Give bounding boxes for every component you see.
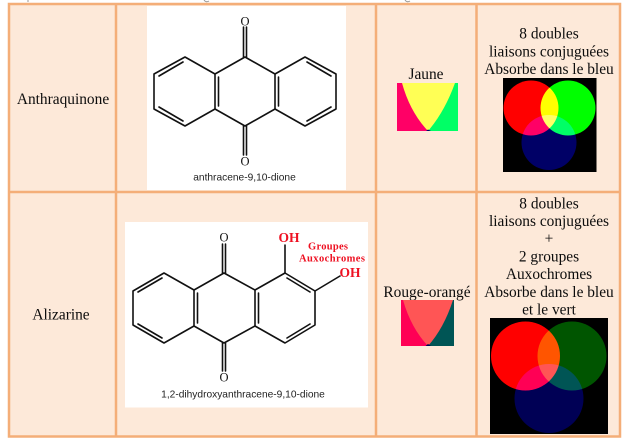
structure: anthraquinone <box>147 6 346 190</box>
auxochrome groups in red <box>278 230 365 280</box>
structure: anthraquinone: O <box>240 154 250 168</box>
clipped text fragments above the table <box>28 0 410 2</box>
structure: alizarine: 1,2-dihydroxyanthracene-9,10-dione <box>161 390 325 400</box>
additive colour diagram: absorbs blue <box>503 78 596 172</box>
absorption text: Alizarine: liaisons conjuguées <box>489 213 609 230</box>
additive colour diagram: absorbs blue and green <box>490 318 608 434</box>
colour name and swatch: Jaune: Jaune <box>408 66 444 83</box>
absorption text: Alizarine: Absorbe dans le bleu <box>484 284 614 301</box>
auxochrome groups in red: OH <box>339 265 361 280</box>
absorption text: Alizarine <box>484 196 614 318</box>
colour name and swatch: Rouge-orangé: Rouge-orangé <box>383 284 471 301</box>
colour name and swatch: Rouge-orangé <box>383 284 471 346</box>
absorption text: Alizarine: + <box>545 230 553 248</box>
structure: anthraquinone: O <box>240 14 250 28</box>
structure: alizarine <box>125 222 368 408</box>
absorption text: Anthraquinone <box>484 26 614 78</box>
structure: anthraquinone: anthracene-9,10-dione <box>193 172 296 184</box>
absorption text: Anthraquinone: 8 doubles <box>519 26 579 42</box>
absorption text: Alizarine: et le vert <box>522 302 577 318</box>
absorption text: Anthraquinone: Absorbe dans le bleu <box>484 61 614 78</box>
structure: alizarine: O <box>219 230 229 244</box>
colour name and swatch: Jaune <box>397 66 458 131</box>
absorption text: Alizarine: 2 groupes <box>519 248 579 266</box>
auxochrome groups in red: OH <box>278 230 300 245</box>
absorption text: Anthraquinone: liaisons conjuguées <box>489 44 609 60</box>
absorption text: Alizarine: Auxochromes <box>506 266 592 283</box>
auxochrome groups in red: Groupes <box>308 242 348 252</box>
structure: alizarine: O <box>219 370 229 384</box>
row label: Alizarine: Alizarine <box>32 306 90 324</box>
absorption text: Alizarine: 8 doubles <box>519 196 579 212</box>
row label: Anthraquinone: Anthraquinone <box>17 91 109 108</box>
auxochrome groups in red: Auxochromes <box>299 254 365 264</box>
